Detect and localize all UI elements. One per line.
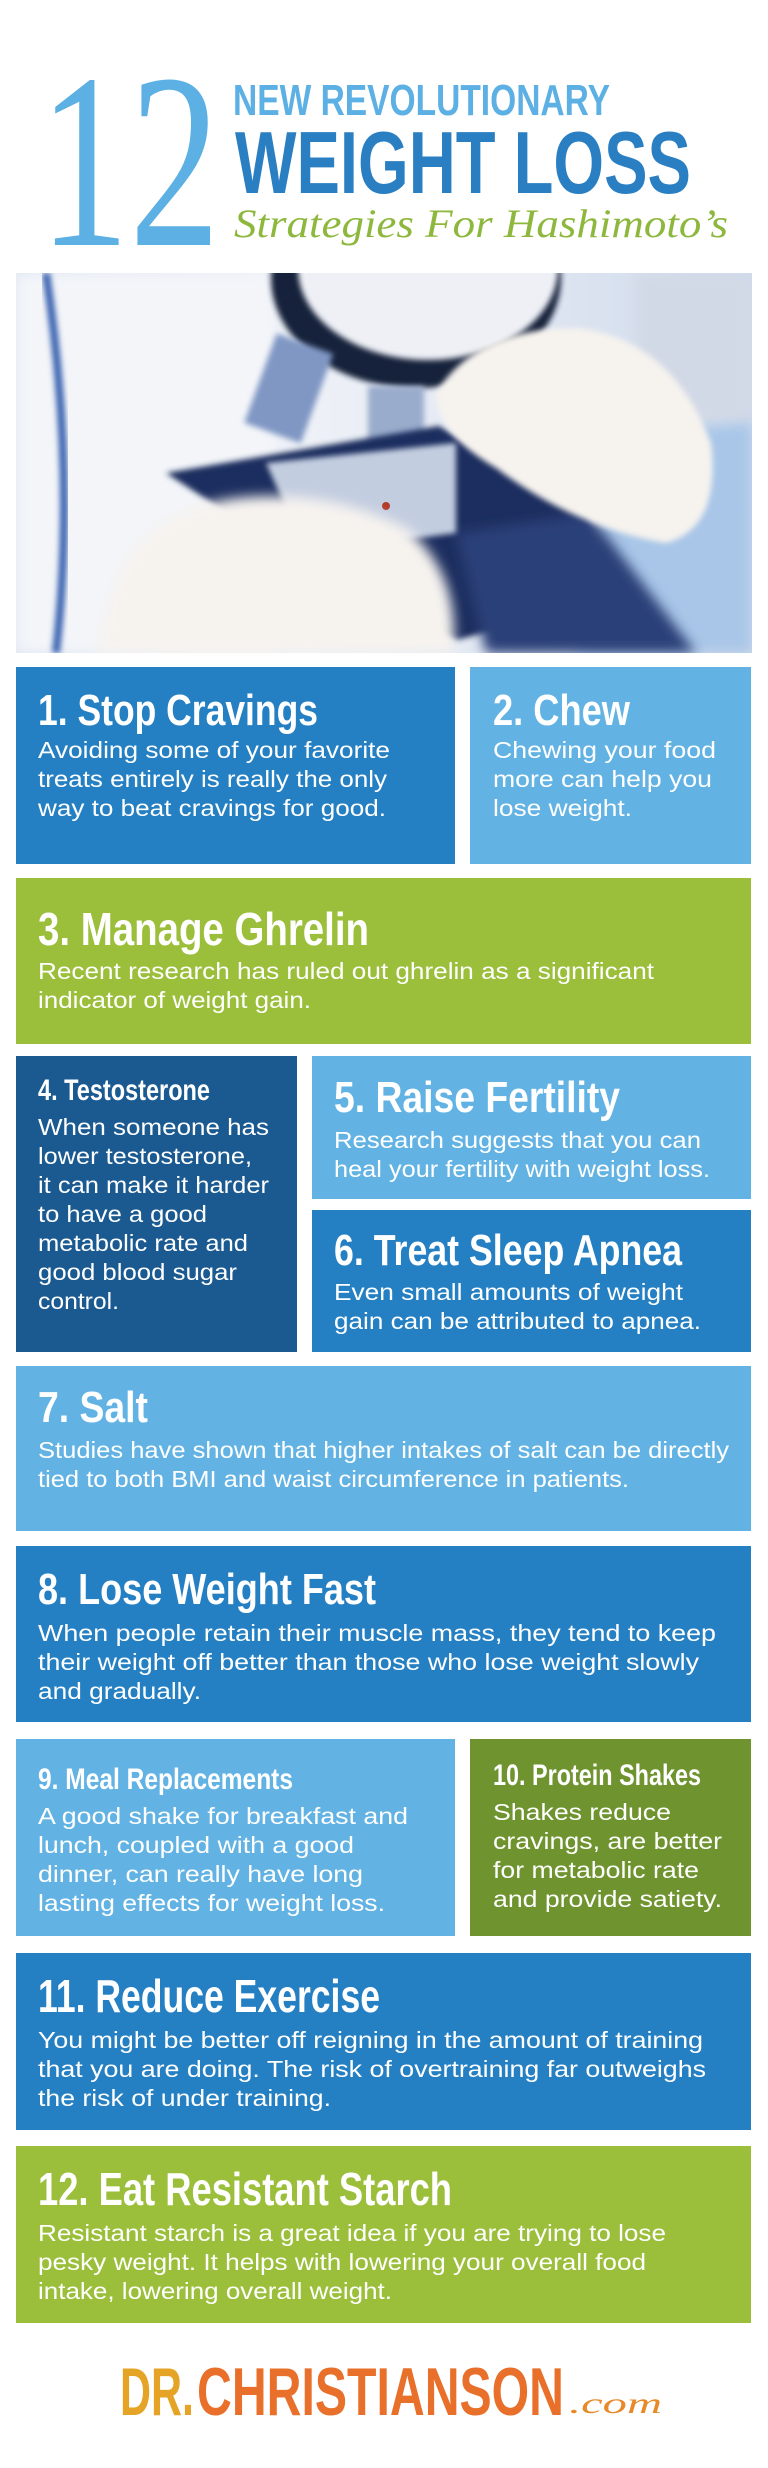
body 4: to have a good (38, 1201, 207, 1227)
body 6: gain can be attributed to apnea. (334, 1308, 701, 1334)
body 8: their weight off better than those who lose weight slowly (38, 1649, 700, 1675)
panel: 2. Chew (470, 667, 751, 864)
panel: 4. Testosterone (16, 1056, 297, 1352)
body 3: Recent research has ruled out ghrelin as a significant (38, 958, 655, 984)
body 5: heal your fertility with weight loss. (334, 1156, 710, 1182)
body 12: Resistant starch is a great idea if you are trying to lose (38, 2220, 666, 2246)
body 2: more can help you (493, 766, 712, 792)
body 4: metabolic rate and (38, 1230, 248, 1256)
panel: 3. Manage Ghrelin (16, 878, 751, 1044)
panel: 12. Eat Resistant Starch (16, 2146, 751, 2323)
heading 7: 7. Salt (38, 1383, 148, 1432)
heading 5: 5. Raise Fertility (334, 1073, 620, 1122)
heading 12: 12. Eat Resistant Starch (38, 2163, 452, 2215)
panel: 8. Lose Weight Fast (16, 1546, 751, 1722)
body 11: that you are doing. The risk of overtraining far outweighs (38, 2056, 706, 2082)
body 3: indicator of weight gain. (38, 987, 311, 1013)
panel: 5. Raise Fertility (312, 1056, 751, 1199)
body 12: intake, lowering overall weight. (38, 2278, 392, 2304)
body 7: Studies have shown that higher intakes of salt can be directly (38, 1437, 730, 1463)
body 4: good blood sugar (38, 1259, 237, 1285)
panel: 1. Stop Cravings (16, 667, 455, 864)
body 1: way to beat cravings for good. (37, 795, 386, 821)
heading 11: 11. Reduce Exercise (38, 1970, 380, 2022)
body 10: cravings, are better (493, 1828, 722, 1854)
body 11: the risk of under training. (38, 2085, 331, 2111)
photo: microscope (16, 273, 752, 653)
heading 9: 9. Meal Replacements (38, 1763, 293, 1796)
subtitle: Strategies For Hashimoto’s (234, 201, 728, 246)
logo: .com (569, 2387, 662, 2420)
body 11: You might be better off reigning in the amount of training (38, 2027, 703, 2053)
heading 10: 10. Protein Shakes (493, 1759, 701, 1792)
body 4: control. (38, 1288, 119, 1314)
heading 4: 4. Testosterone (38, 1074, 210, 1107)
body 2: lose weight. (493, 795, 632, 821)
body 1: treats entirely is really the only (38, 766, 388, 792)
body 8: When people retain their muscle mass, they tend to keep (38, 1620, 716, 1646)
body 9: A good shake for breakfast and (38, 1803, 408, 1829)
body 9: lasting effects for weight loss. (38, 1890, 385, 1916)
panel: 6. Treat Sleep Apnea (312, 1210, 751, 1352)
heading 3: 3. Manage Ghrelin (38, 903, 369, 955)
heading 6: 6. Treat Sleep Apnea (334, 1226, 682, 1275)
body 4: it can make it harder (38, 1172, 269, 1198)
body 8: and gradually. (38, 1678, 201, 1704)
body 9: lunch, coupled with a good (38, 1832, 354, 1858)
body 10: for metabolic rate (493, 1857, 699, 1883)
title (39, 23, 728, 300)
body 6: Even small amounts of weight (334, 1279, 684, 1305)
logo: CHRISTIANSON (197, 2354, 564, 2430)
body 9: dinner, can really have long (38, 1861, 363, 1887)
body 10: Shakes reduce (493, 1799, 671, 1825)
heading 8: 8. Lose Weight Fast (38, 1565, 376, 1614)
heading 1: 1. Stop Cravings (38, 686, 318, 735)
panel: 7. Salt (16, 1366, 751, 1531)
body 2: Chewing your food (493, 737, 716, 763)
body 7: tied to both BMI and waist circumference in patients. (38, 1466, 629, 1492)
body 4: When someone has (38, 1114, 269, 1140)
body 1: Avoiding some of your favorite (38, 737, 390, 763)
heading 2: 2. Chew (493, 686, 631, 735)
title number 12: 12 (39, 23, 220, 300)
body 4: lower testosterone, (38, 1143, 252, 1169)
panel: 9. Meal Replacements (16, 1739, 455, 1936)
panel: 11. Reduce Exercise (16, 1953, 751, 2130)
title line 1: NEW REVOLUTIONARY (233, 76, 610, 125)
body 10: and provide satiety. (493, 1886, 722, 1912)
logo: DR. (120, 2354, 194, 2430)
body 5: Research suggests that you can (334, 1127, 701, 1153)
panel: 10. Protein Shakes (470, 1739, 751, 1936)
body 12: pesky weight. It helps with lowering your overall food (38, 2249, 646, 2275)
